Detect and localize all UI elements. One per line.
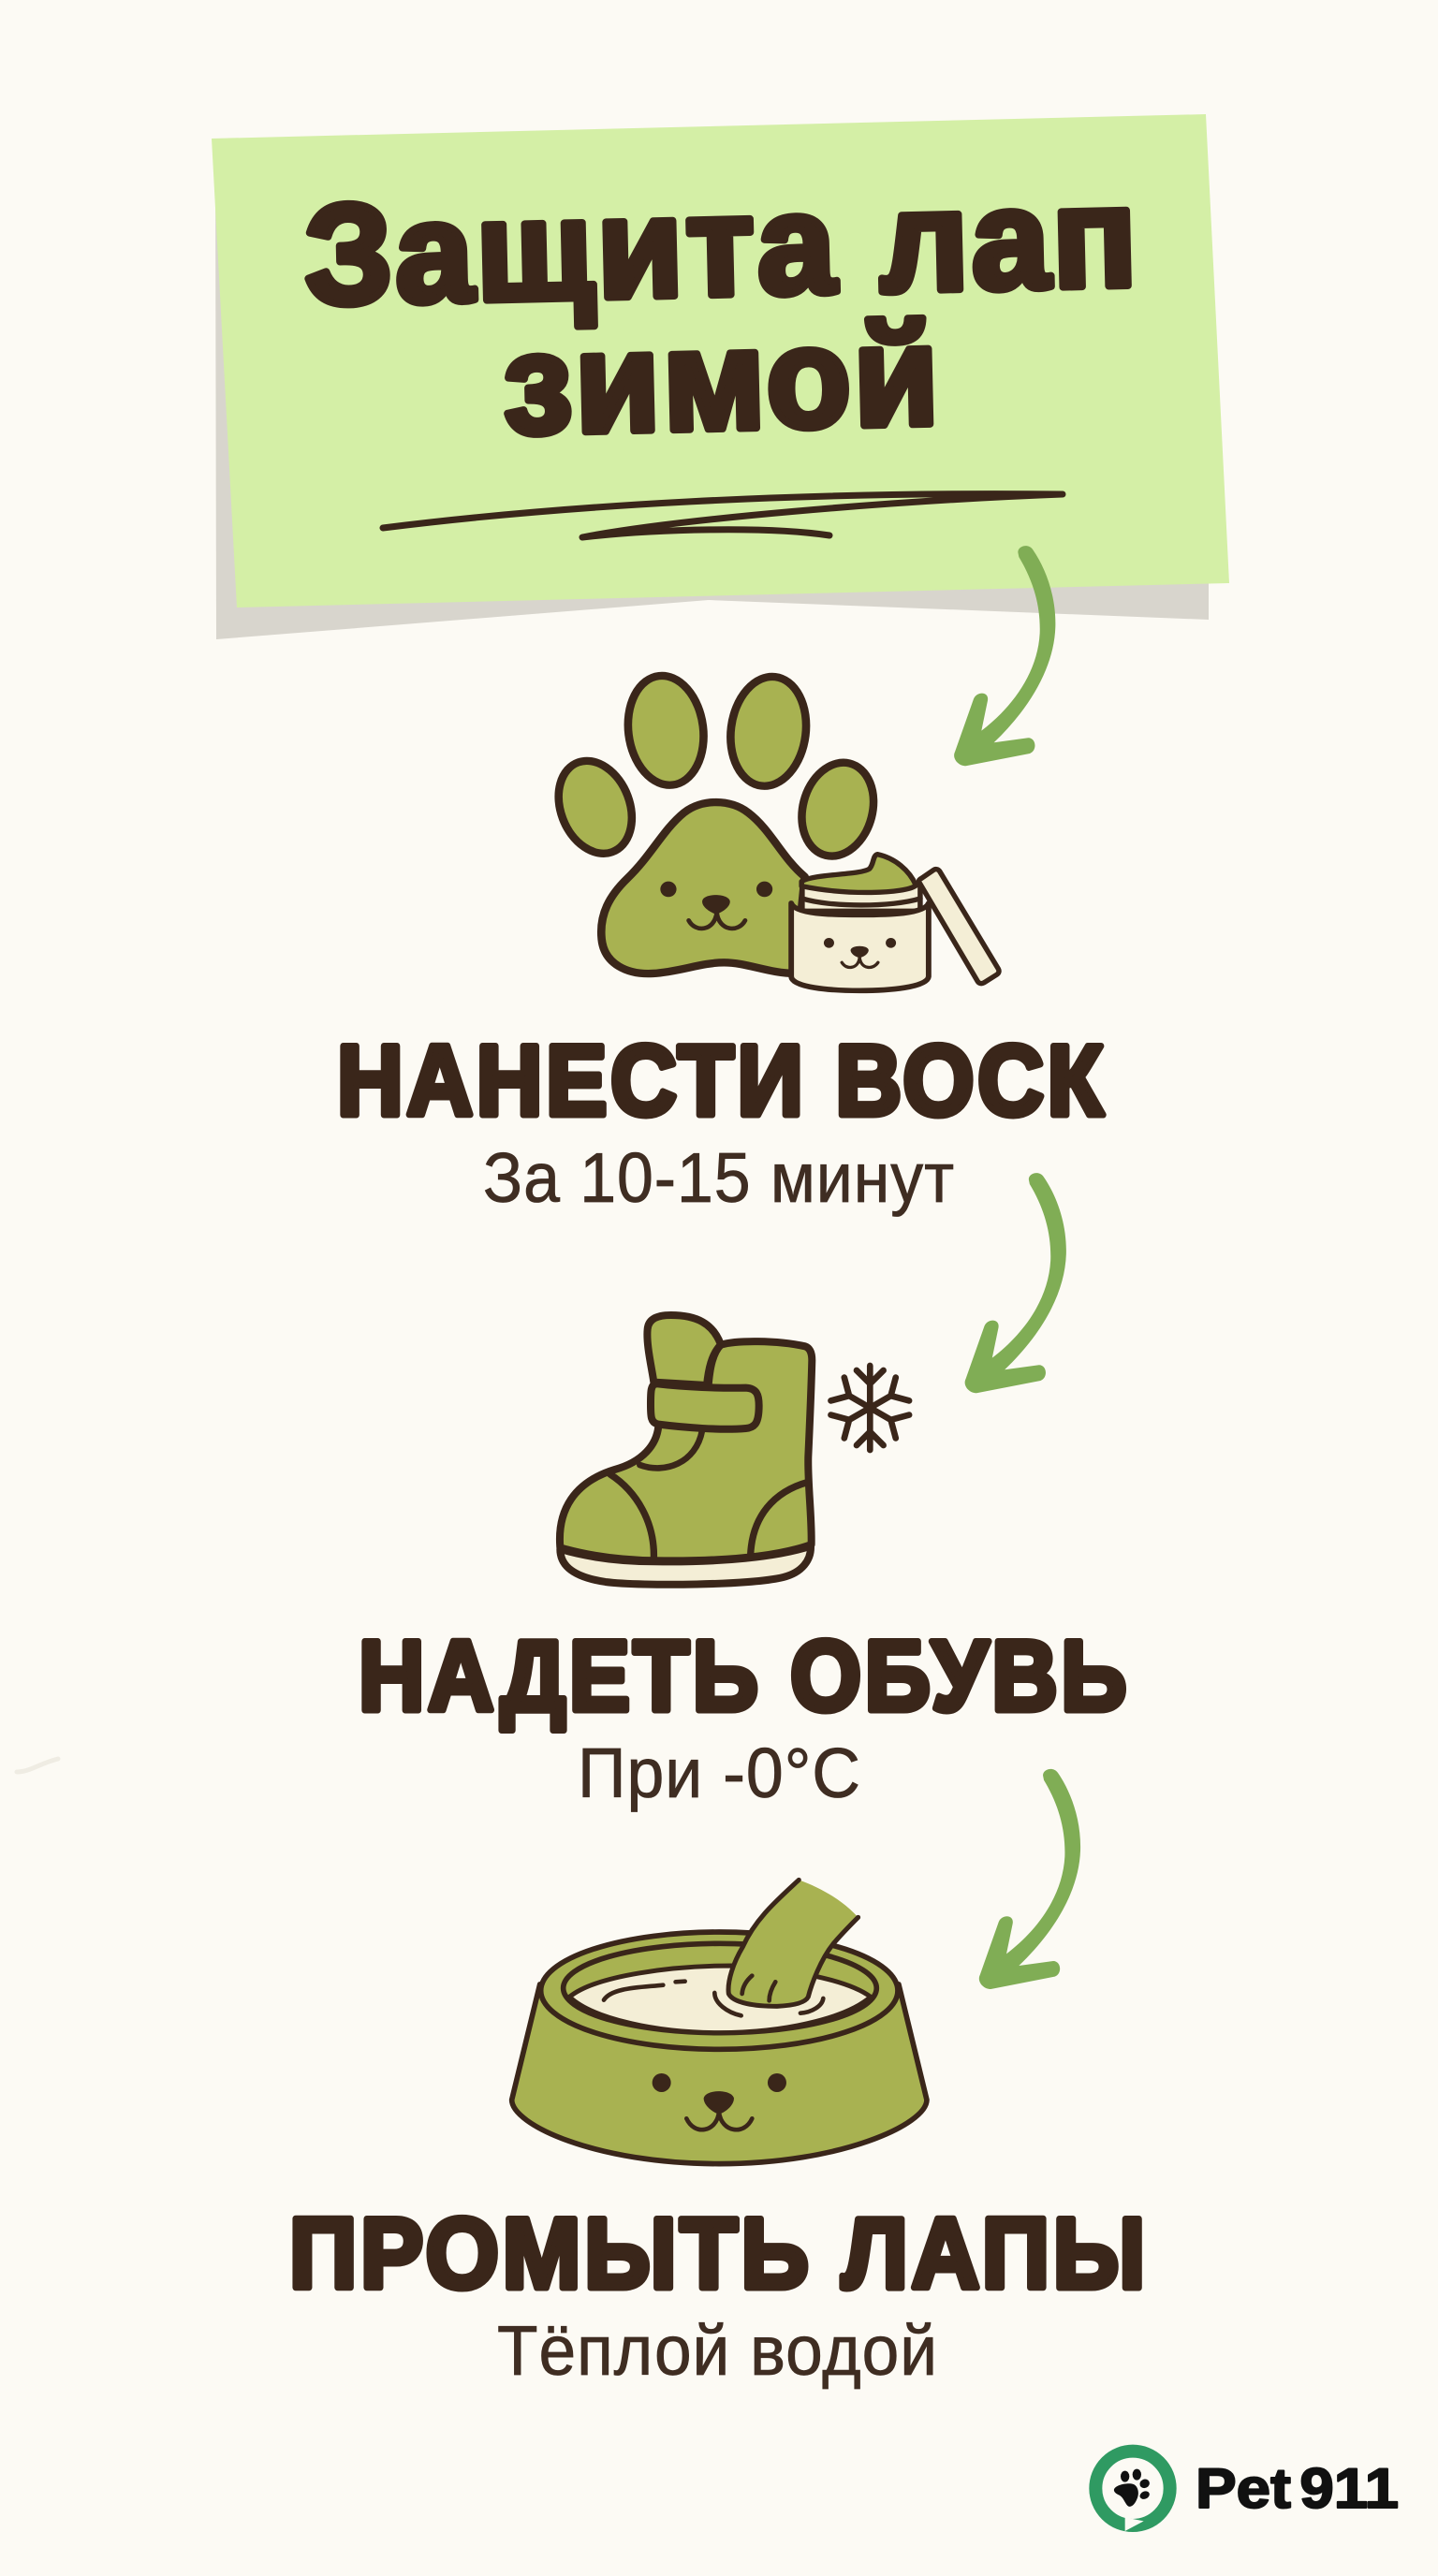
- bowl face: [653, 2073, 786, 2130]
- jar lid: [919, 870, 999, 984]
- heading: step 2: НАДЕТЬ ОБУВЬ: [359, 1619, 1130, 1732]
- icon: snowflake: [830, 1366, 909, 1450]
- bowl rim: [541, 1932, 898, 2049]
- icon: paw with wax jar: [546, 671, 999, 990]
- paw pad: [601, 802, 805, 973]
- hand-drawn underline: [383, 494, 1063, 537]
- arrow 3: [979, 1769, 1080, 1989]
- logo wordmark: Pet 911: [1196, 2457, 1399, 2520]
- inner rim: [564, 1943, 876, 2033]
- jar body: [791, 903, 929, 990]
- jar neck: [802, 885, 920, 911]
- title text: зимой: [502, 296, 943, 464]
- water: [569, 1966, 871, 2033]
- jar face: [824, 938, 896, 968]
- logo: Pet 911: [1095, 2452, 1399, 2531]
- arrow 1: [954, 546, 1055, 766]
- paw toes: [546, 671, 884, 864]
- boot seams: [610, 1430, 808, 1560]
- dog leg in water: [728, 1880, 858, 2006]
- subtext: step 2: При -0°C: [578, 1734, 861, 1812]
- bowl body: [512, 1984, 927, 2164]
- boot strap: [651, 1383, 759, 1429]
- title card: [212, 114, 1229, 639]
- icon: winter boot: [560, 1315, 909, 1585]
- logo icon: chat bubble with paw: [1095, 2452, 1170, 2531]
- paw face: [660, 882, 772, 929]
- green sticky note: [212, 114, 1229, 607]
- water highlights and ripples: [604, 1982, 823, 2015]
- boot sole: [560, 1546, 811, 1585]
- boot tongue: [647, 1315, 721, 1385]
- arrow 2: [965, 1173, 1066, 1393]
- title text: [302, 157, 1144, 469]
- wax in jar: [801, 855, 916, 892]
- title text: Защита лап: [302, 157, 1141, 335]
- subtext: step 1: За 10-15 минут: [483, 1138, 955, 1217]
- subtext: step 3: Тёплой водой: [497, 2311, 938, 2390]
- boot body: [560, 1341, 812, 1560]
- card shadow: [215, 150, 1209, 639]
- heading: step 3: ПРОМЫТЬ ЛАПЫ: [289, 2197, 1149, 2309]
- icon: bowl with paw: [512, 1880, 927, 2164]
- heading: step 1: НАНЕСТИ ВОСК: [337, 1024, 1107, 1136]
